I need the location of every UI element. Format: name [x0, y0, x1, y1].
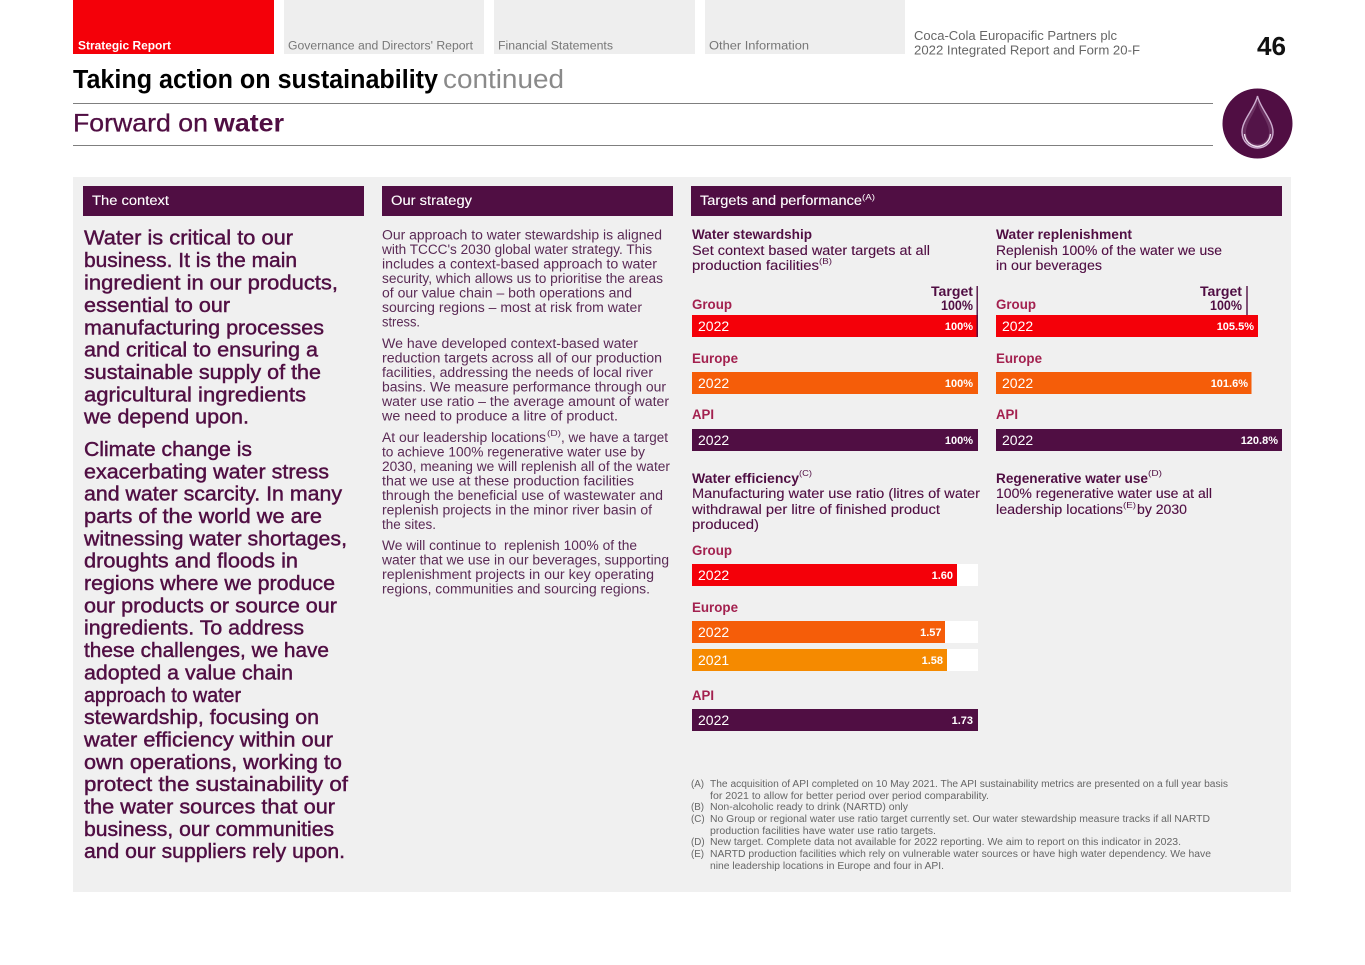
- water efficiency heading: [691, 468, 981, 532]
- strategy text: At our leadership locations: [382, 430, 546, 445]
- context text: own operations, working to: [84, 751, 342, 774]
- strategy text: basins. We measure performance through our: [382, 380, 667, 394]
- strategy text: water use ratio – the average amount of water: [381, 394, 670, 409]
- footnotes: NARTD production facilities which rely on vulnerable water sources or have high water dependency. We have: [710, 849, 1212, 860]
- water stewardship chart: 2022: [698, 318, 729, 334]
- strategy text: water that we use in our beverages, supporting: [381, 552, 669, 568]
- context header: The context: [92, 193, 169, 208]
- water efficiency chart: 2022: [698, 567, 729, 583]
- context text: the water sources that our: [84, 796, 335, 818]
- water stewardship chart: 100%: [945, 321, 973, 333]
- strategy text: We will continue to replenish 100% of the: [382, 538, 637, 553]
- footnotes: (A): [691, 779, 704, 790]
- footnotes: (D): [691, 837, 705, 848]
- report name: 2022 Integrated Report and Form 20-F: [914, 44, 1140, 58]
- strategy text: that we use at these production facilities: [382, 474, 634, 488]
- strategy text: security, which allows us to prioritise the areas: [382, 271, 663, 286]
- footnotes: New target. Complete data not available for 2022 reporting. We aim to report on this indicator in 2023.: [710, 837, 1181, 848]
- footnotes: The acquisition of API completed on 10 May 2021. The API sustainability metrics are presented on a full year basis: [710, 779, 1228, 790]
- water stewardship chart: Europe: [692, 351, 738, 366]
- regenerative water use heading: [996, 468, 1212, 517]
- strategy text: , we have a target: [561, 430, 668, 445]
- title: Taking action on sustainability: [73, 66, 439, 94]
- footnotes: (E): [691, 849, 704, 860]
- water efficiency chart: 1.57: [920, 627, 942, 639]
- context header: [83, 186, 364, 216]
- regenerative water use heading: Regenerative water use: [996, 471, 1148, 486]
- footnotes: nine leadership locations in Europe and four in API.: [710, 861, 944, 872]
- context text: we depend upon.: [83, 406, 249, 428]
- water stewardship chart: 100%: [945, 378, 973, 390]
- context text: regions where we produce: [84, 572, 335, 595]
- context text: and critical to ensuring a: [84, 338, 319, 362]
- water efficiency heading: (C): [799, 468, 812, 478]
- context text: stewardship, focusing on: [84, 706, 319, 729]
- water efficiency heading: Manufacturing water use ratio (litres of water: [692, 486, 981, 501]
- footnotes: Non-alcoholic ready to drink (NARTD) only: [710, 802, 908, 813]
- panel: targets and performance: [691, 186, 1282, 872]
- strategy text: We have developed context-based water: [382, 336, 639, 351]
- strategy text: we need to produce a litre of product.: [381, 408, 618, 424]
- water efficiency chart: 1.58: [922, 655, 943, 667]
- strategy text: with TCCC's 2030 global water strategy. This: [381, 242, 652, 257]
- regenerative water use heading: (E): [1123, 500, 1136, 510]
- panel background: [73, 177, 1291, 892]
- section heading: [73, 110, 284, 138]
- strategy text: stress.: [382, 314, 420, 330]
- water stewardship chart: 100%: [945, 435, 973, 447]
- water replenishment heading: [996, 227, 1222, 273]
- water replenishment chart: 2022: [1002, 375, 1033, 391]
- water efficiency chart: [692, 543, 978, 731]
- context text: ingredients. To address: [84, 616, 304, 640]
- strategy text: of our value chain – both operations and: [382, 286, 632, 300]
- water replenishment chart: 101.6%: [1211, 378, 1248, 390]
- water efficiency chart: Europe: [692, 600, 738, 615]
- panel: our strategy: [381, 186, 673, 596]
- context text: manufacturing processes: [84, 316, 324, 340]
- water efficiency heading: Water efficiency: [692, 471, 799, 486]
- context text: business, our communities: [84, 818, 334, 841]
- page number: 46: [1257, 31, 1286, 61]
- water efficiency chart: API: [692, 688, 714, 703]
- context text: water efficiency within our: [83, 728, 333, 752]
- context text: exacerbating water stress: [84, 460, 329, 484]
- context text: approach to water: [84, 684, 241, 707]
- footnotes: (B): [691, 802, 704, 813]
- context text: [83, 226, 348, 863]
- water replenishment heading: Water replenishment: [996, 227, 1133, 242]
- strategy text: replenish projects in the minor river basin of: [382, 502, 652, 518]
- water replenishment heading: in our beverages: [996, 258, 1102, 273]
- panel: the context: [83, 186, 364, 863]
- navigation tabs: Governance and Directors' Report: [288, 40, 474, 52]
- strategy text: 2030, meaning we will replenish all of the water: [382, 459, 670, 474]
- context text: parts of the world we are: [84, 505, 322, 528]
- footnotes: production facilities have water use ratio targets.: [710, 826, 936, 837]
- water stewardship heading: Water stewardship: [692, 227, 812, 242]
- water efficiency chart: 1.60: [932, 570, 953, 582]
- icon: water drop: [1222, 88, 1292, 158]
- strategy text: to achieve 100% regenerative water use by: [382, 444, 645, 460]
- water replenishment heading: Replenish 100% of the water we use: [996, 243, 1222, 258]
- water replenishment chart: API: [996, 407, 1018, 422]
- water replenishment chart: 100%: [1210, 298, 1242, 313]
- section heading: water: [213, 110, 284, 138]
- context text: adopted a value chain: [84, 662, 293, 684]
- strategy text: regions, communities and sourcing regions.: [382, 582, 650, 596]
- context text: our products or source our: [84, 594, 337, 618]
- water stewardship chart: 2022: [698, 375, 729, 391]
- water efficiency chart: 1.73: [952, 715, 973, 727]
- strategy text: includes a context-based approach to water: [382, 256, 658, 272]
- water replenishment chart: 105.5%: [1217, 321, 1254, 333]
- context text: sustainable supply of the: [84, 361, 321, 384]
- water stewardship chart: 100%: [941, 298, 973, 313]
- water replenishment chart: 120.8%: [1241, 435, 1278, 447]
- context text: Water is critical to our: [84, 226, 293, 250]
- water efficiency chart: Group: [692, 543, 732, 558]
- context text: witnessing water shortages,: [83, 528, 347, 550]
- navigation tabs: Strategic Report: [78, 40, 171, 52]
- strategy header: Our strategy: [391, 193, 472, 208]
- water replenishment chart: Europe: [996, 351, 1042, 366]
- context text: agricultural ingredients: [84, 384, 306, 406]
- strategy text: Our approach to water stewardship is aligned: [382, 228, 662, 242]
- water efficiency heading: produced): [692, 517, 759, 532]
- regenerative water use heading: (D): [1148, 468, 1162, 478]
- water efficiency chart: 2022: [698, 624, 729, 640]
- context text: protect the sustainability of: [84, 773, 348, 796]
- navigation tabs: Other Information: [709, 40, 809, 52]
- footnotes: No Group or regional water use ratio target currently set. Our water stewardship measure tracks if all NARTD: [710, 814, 1210, 825]
- water stewardship chart: Group: [692, 297, 732, 312]
- water stewardship heading: Set context based water targets at all: [692, 243, 930, 258]
- targets header: Targets and performance: [700, 193, 862, 208]
- water stewardship heading: [692, 227, 930, 273]
- regenerative water use heading: by 2030: [1137, 502, 1187, 517]
- strategy text: the sites.: [382, 517, 436, 532]
- water stewardship chart: API: [692, 407, 714, 422]
- water replenishment chart: 2022: [1002, 432, 1033, 448]
- water stewardship chart: [692, 284, 978, 451]
- water efficiency chart: 2022: [698, 712, 729, 728]
- footnotes: (C): [691, 814, 705, 825]
- strategy text: (D): [547, 428, 561, 438]
- strategy text: through the beneficial use of wastewater and: [382, 488, 663, 503]
- navigation tabs: [73, 0, 905, 54]
- context text: and our suppliers rely upon.: [84, 840, 345, 863]
- water stewardship heading: production facilities: [692, 258, 819, 273]
- footnotes: [691, 779, 1228, 872]
- context text: Climate change is: [84, 438, 252, 461]
- water replenishment chart: [996, 284, 1282, 451]
- water replenishment chart: 2022: [1002, 318, 1033, 334]
- strategy text: sourcing regions – most at risk from water: [382, 300, 643, 315]
- strategy text: facilities, addressing the needs of local river: [382, 365, 654, 380]
- water stewardship chart: 2022: [698, 432, 729, 448]
- context text: these challenges, we have: [84, 639, 329, 662]
- report name: Coca-Cola Europacific Partners plc: [914, 29, 1117, 43]
- context text: and water scarcity. In many: [84, 482, 343, 506]
- water efficiency heading: withdrawal per litre of finished product: [691, 502, 940, 517]
- footnotes: for 2021 to allow for better period over period comparability.: [710, 791, 989, 802]
- water replenishment chart: Target: [1200, 284, 1243, 299]
- water stewardship chart: Target: [931, 284, 974, 299]
- context text: droughts and floods in: [84, 550, 298, 572]
- section heading: Forward on: [73, 110, 208, 138]
- targets header: [691, 186, 1282, 216]
- strategy text: [381, 228, 670, 596]
- context text: business. It is the main: [84, 249, 297, 272]
- strategy text: replenishment projects in our key operating: [382, 567, 654, 582]
- regenerative water use heading: 100% regenerative water use at all: [996, 486, 1212, 501]
- title: continued: [443, 66, 564, 94]
- regenerative water use heading: leadership locations: [996, 502, 1123, 517]
- strategy text: reduction targets across all of our production: [382, 350, 662, 366]
- navigation tabs: Financial Statements: [498, 40, 613, 52]
- water stewardship heading: (B): [819, 256, 832, 266]
- context text: ingredient in our products,: [84, 272, 338, 294]
- report name: [914, 29, 1140, 58]
- water efficiency chart: 2021: [698, 652, 729, 668]
- context text: essential to our: [84, 294, 230, 317]
- water replenishment chart: Group: [996, 297, 1036, 312]
- strategy header: [382, 186, 673, 216]
- targets header: (A): [862, 192, 875, 202]
